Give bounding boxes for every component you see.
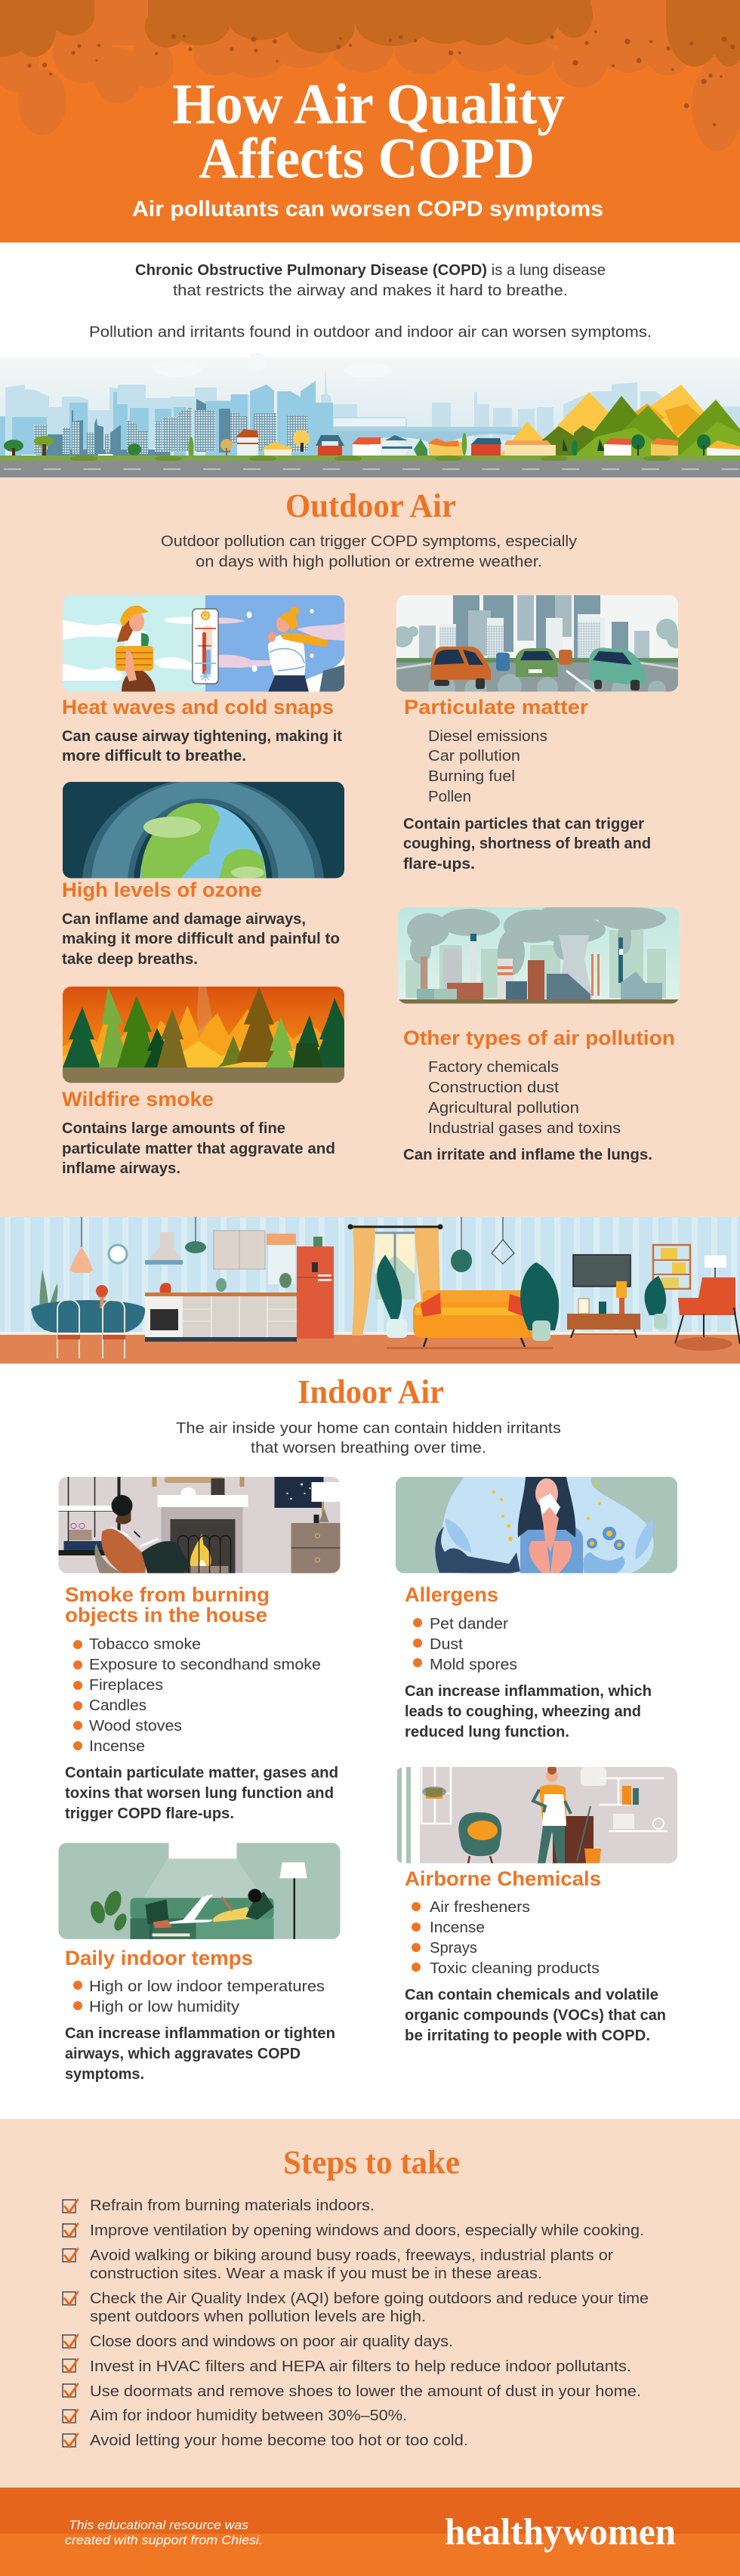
text: chemical effects: organic compounds (VOCs) that can [405, 2007, 666, 2024]
text: allergen effects: reduced lung function. [405, 1724, 569, 1740]
checklist: Invest in HVAC filters and HEPA air filters to help reduce indoor pollutants. [90, 2358, 631, 2375]
kitchen [145, 1217, 334, 1342]
panel: indoor air [59, 1373, 677, 2083]
list: smoke sources: Wood stoves [89, 1717, 182, 1734]
text: chemical effects: be irritating to people with COPD. [405, 2028, 650, 2044]
television [573, 1255, 631, 1286]
text: ozone: take deep breaths. [62, 951, 198, 968]
sofa with woman [130, 1889, 273, 1939]
green car [516, 648, 558, 677]
bullets [412, 1902, 421, 1972]
list: airborne chemicals: Air fresheners [430, 1898, 530, 1916]
heading: smoke from burning objects [65, 1583, 270, 1626]
card image: airborne chemicals [396, 1765, 677, 1864]
text: particulate matter: coughing, shortness of breath and [403, 836, 651, 852]
text: daily temp effects: Can increase inflammation or tighten [65, 2025, 335, 2042]
teal car [589, 648, 646, 690]
checklist: Improve ventilation by opening windows and doors, especially while cooking. [90, 2222, 644, 2239]
footer [0, 2488, 740, 2576]
list: allergens: Dust [430, 1635, 463, 1653]
media console [567, 1281, 640, 1338]
factory buildings [417, 934, 662, 1001]
woman sneezing [518, 1477, 583, 1574]
text: particulate matter: flare-ups. [403, 856, 475, 873]
text: heat waves: more difficult to breathe. [62, 748, 246, 764]
checklist: construction sites. Wear a mask if you must be in these areas. [90, 2265, 542, 2282]
card image: allergens [396, 1477, 677, 1574]
card image: particulate matter [396, 595, 678, 692]
text: allergen effects [405, 1683, 652, 1740]
intro text: Pollution and irritants found in outdoor and indoor air can worsen symptoms. [89, 323, 652, 341]
text: wildfire [62, 1120, 335, 1177]
road [0, 461, 740, 477]
heading: smoke from burning objects: objects in the house [65, 1604, 267, 1626]
checklist: Close doors and windows on poor air quality days. [90, 2333, 453, 2350]
list: particulate matter: Pollen [428, 788, 471, 805]
heading: outdoor air: Outdoor Air [285, 487, 456, 524]
text: heat waves [62, 728, 342, 764]
list: airborne chemicals: Toxic cleaning products [430, 1960, 600, 1977]
heading: heat waves: Heat waves and cold snaps [62, 696, 334, 718]
card image: ozone [63, 782, 344, 878]
list: particulate matter: Car pollution [428, 747, 520, 764]
checkboxes [63, 2198, 79, 2448]
text: wildfire: inflame airways. [62, 1160, 180, 1177]
dining table and chairs [31, 1217, 146, 1358]
list: daily indoor temps: High or low humidity [89, 1998, 240, 2015]
dresser [553, 1816, 594, 1864]
smoke clouds [0, 0, 740, 151]
floor lamp [279, 1862, 307, 1939]
card image: daily indoor temps [59, 1842, 340, 1939]
list: smoke sources: Fireplaces [89, 1676, 163, 1694]
panel: steps to take [0, 2119, 740, 2488]
starry picture [275, 1477, 323, 1508]
cat [435, 1527, 520, 1574]
list: airborne chemicals: Sprays [430, 1939, 477, 1957]
list: allergens [413, 1615, 517, 1673]
heading: ozone: High levels of ozone [62, 879, 262, 901]
bullets [73, 1640, 82, 1750]
text: smoke effects: Contain particulate matter, gases and [65, 1765, 338, 1781]
heading: wildfire: Wildfire smoke [62, 1088, 214, 1110]
text: wildfire: Contains large amounts of fine [62, 1120, 285, 1137]
plant [91, 1891, 127, 1931]
text: smoke effects [65, 1765, 338, 1822]
heading: smoke from burning objects: Smoke from burning [65, 1583, 270, 1606]
intro text: that restricts the airway and makes it hard to breathe. [173, 282, 568, 299]
text: chemical effects [405, 1987, 666, 2044]
text: allergen effects: leads to coughing, wheezing and [405, 1703, 641, 1720]
thermometer [193, 609, 218, 684]
mountains [500, 385, 740, 456]
text: smoke effects: trigger COPD flare-ups. [65, 1805, 234, 1822]
title: Affects COPD [199, 127, 535, 190]
shelves [600, 1778, 668, 1831]
list: allergens: Mold spores [430, 1656, 517, 1673]
sofa [387, 1290, 553, 1349]
outdoor air intro [161, 533, 578, 570]
bookshelf [653, 1245, 690, 1289]
outdoor air intro: on days with high pollution or extreme weather. [196, 553, 542, 570]
man in winter clothes [268, 607, 328, 692]
checklist: spent outdoors when pollution levels are high. [90, 2308, 426, 2325]
heading: other pollution: Other types of air pollution [403, 1027, 675, 1049]
bullets [73, 1981, 82, 2010]
sponsor note [65, 2518, 263, 2547]
heading: steps to take: Steps to take [283, 2144, 460, 2181]
list: airborne chemicals: Incense [430, 1919, 485, 1936]
fireplace [157, 1495, 248, 1574]
heading: particulate matter: Particulate matter [404, 696, 589, 718]
indoor air intro [176, 1419, 561, 1456]
sponsor note: created with support from Chiesi. [65, 2533, 263, 2547]
subtitle: Air pollutants can worsen COPD symptoms [132, 197, 603, 221]
woman cleaning [533, 1765, 571, 1864]
elevated train and bridge [333, 418, 521, 456]
intro text: Chronic Obstructive Pulmonary Disease (COPD) is a lung disease [135, 261, 606, 279]
list: particulate matter: Burning fuel [428, 768, 515, 785]
floor lamp and armchair [645, 1256, 740, 1351]
bullets [413, 1618, 422, 1667]
refrigerator [297, 1246, 334, 1339]
list: smoke sources [73, 1635, 321, 1755]
text: heat waves: Can cause airway tightening, making it [62, 728, 342, 745]
heading: allergens: Allergens [405, 1583, 498, 1606]
text: ozone: Can inflame and damage airways, [62, 911, 306, 928]
checklist [63, 2197, 649, 2449]
list: daily indoor temps [73, 1978, 325, 2015]
list: particulate matter: Diesel emissions [428, 727, 547, 745]
text: smoke effects: toxins that worsen lung function and [65, 1785, 334, 1802]
list: other pollution [428, 1058, 621, 1137]
checklist: Avoid letting your home become too hot or too cold. [90, 2432, 468, 2449]
window [59, 1477, 121, 1555]
earth [140, 803, 267, 878]
intro text [89, 261, 652, 341]
list: allergens: Pet dander [430, 1615, 508, 1632]
checklist: Refrain from burning materials indoors. [90, 2197, 375, 2214]
list: other pollution: Construction dust [428, 1079, 559, 1096]
outdoor air intro: Outdoor pollution can trigger COPD symptoms, especially [161, 533, 578, 550]
checklist: Avoid walking or biking around busy roads, freeways, industrial plants or [90, 2247, 613, 2264]
orange car [430, 647, 491, 689]
monstera plant [520, 1262, 559, 1341]
card image: smoke from burning objects [59, 1477, 340, 1574]
burning trees [63, 987, 344, 1067]
text: chemical effects: Can contain chemicals and volatile [405, 1987, 658, 2003]
text: daily temp effects: airways, which aggravates COPD [65, 2046, 301, 2062]
text: ozone: making it more difficult and painful to [62, 931, 340, 947]
text: other pollution: Can irritate and inflame the lungs. [403, 1147, 652, 1163]
logo: healthywomen: healthywomen [445, 2510, 676, 2553]
panel: outdoor air [0, 478, 740, 1217]
dresser [291, 1523, 340, 1574]
text: wildfire: particulate matter that aggravate and [62, 1141, 335, 1157]
text: particulate matter: Contain particles that can trigger [403, 816, 644, 832]
list: smoke sources: Candles [89, 1697, 146, 1714]
person reading by the fire [94, 1495, 190, 1574]
title [172, 73, 565, 190]
checklist: Aim for indoor humidity between 30%–50%. [90, 2407, 407, 2424]
hanging lamps [451, 1217, 514, 1272]
checklist: Use doormats and remove shoes to lower the amount of dust in your home. [90, 2383, 641, 2400]
text: ozone [62, 911, 340, 968]
text: allergen effects: Can increase inflammation, which [405, 1683, 652, 1700]
text: particulate matter [403, 816, 651, 873]
list: airborne chemicals [412, 1898, 600, 1977]
indoor air intro: The air inside your home can contain hidden irritants [176, 1419, 561, 1437]
title: How Air Quality [172, 73, 565, 136]
hero panel [0, 0, 740, 242]
home interior banner illustration [0, 1217, 740, 1364]
city banner illustration [0, 353, 740, 478]
woman in summer clothes [116, 606, 156, 692]
list: other pollution: Factory chemicals [428, 1058, 559, 1076]
list: smoke sources: Tobacco smoke [89, 1635, 201, 1653]
air conditioner [143, 1843, 257, 1898]
card image: wildfire [63, 987, 344, 1083]
indoor air intro: that worsen breathing over time. [251, 1439, 486, 1456]
list: smoke sources: Exposure to secondhand smoke [89, 1656, 321, 1673]
armchair [458, 1812, 501, 1864]
window and curtains [347, 1224, 442, 1338]
list: other pollution: Agricultural pollution [428, 1099, 579, 1117]
list: particulate matter [428, 727, 547, 805]
smoke plumes [407, 902, 666, 975]
card image: factory pollution [398, 902, 680, 1004]
heading: daily indoor temps: Daily indoor temps [65, 1947, 253, 1969]
checklist: Check the Air Quality Index (AQI) before going outdoors and reduce your time [90, 2290, 649, 2307]
flowers [583, 1527, 624, 1574]
card image: heat waves and cold snaps [63, 595, 344, 692]
list: daily indoor temps: High or low indoor temperatures [89, 1978, 325, 1995]
list: other pollution: Industrial gases and toxins [428, 1120, 621, 1137]
text: daily temp effects [65, 2025, 335, 2083]
trees and houses [4, 429, 740, 461]
sponsor note: This educational resource was [69, 2518, 249, 2532]
list: smoke sources: Incense [89, 1737, 145, 1755]
text: daily temp effects: symptoms. [65, 2066, 144, 2083]
heading: indoor air: Indoor Air [298, 1373, 444, 1410]
heading: airborne chemicals: Airborne Chemicals [405, 1867, 601, 1890]
